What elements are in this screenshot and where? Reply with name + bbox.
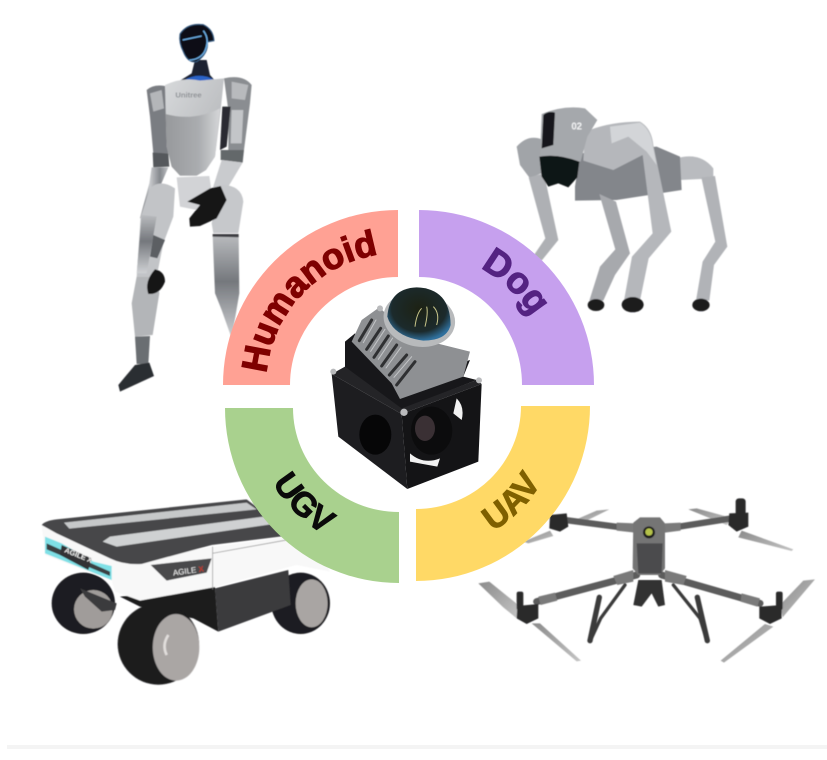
UGV side panel xyxy=(215,570,291,632)
humanoid right leg xyxy=(212,185,243,338)
sensor dome xyxy=(387,287,451,341)
dog main leg highlight xyxy=(610,123,657,165)
dog torso xyxy=(575,147,682,201)
drone arms xyxy=(537,518,760,603)
sector: UAV xyxy=(416,406,590,581)
humanoid left foot xyxy=(118,363,154,392)
humanoid head xyxy=(180,24,214,62)
drone propellers xyxy=(478,508,815,663)
bottom band xyxy=(7,745,827,749)
humanoid belly plate xyxy=(166,108,220,176)
UGV white shell xyxy=(42,525,330,601)
humanoid collar light xyxy=(183,76,213,83)
label: Dog: Dog xyxy=(482,246,548,316)
dog main leg xyxy=(583,122,671,301)
sensor dome ring xyxy=(379,286,460,352)
drone arm joints xyxy=(538,523,760,607)
dog front left shoulder xyxy=(517,138,545,178)
UGV shell seams xyxy=(213,540,287,589)
dog rear hip xyxy=(677,156,713,180)
dog sensor panel xyxy=(542,112,555,148)
sensor mount wedge xyxy=(332,333,477,409)
dog front foot xyxy=(622,297,644,312)
dog head xyxy=(540,107,597,162)
robot dog xyxy=(517,107,727,312)
dog grille xyxy=(539,156,579,187)
sensor window highlights xyxy=(410,398,463,467)
dog rear foot xyxy=(692,299,710,311)
drone body xyxy=(633,517,665,575)
wheeled ground vehicle xyxy=(42,499,330,685)
UGV underside xyxy=(120,587,218,632)
UGV side badge: AGILE X xyxy=(172,564,205,578)
humanoid near arm xyxy=(212,77,252,194)
label: UAV: UAV xyxy=(480,468,537,528)
label: UGV: UGV xyxy=(276,470,338,530)
drone lower body panel xyxy=(637,543,663,573)
sensor cube right face xyxy=(402,384,482,489)
humanoid knee guard xyxy=(147,269,165,294)
sector: Dog xyxy=(419,210,594,385)
central sensor xyxy=(330,286,482,489)
dog middle leg xyxy=(589,194,630,301)
label: Humanoid: Humanoid xyxy=(241,228,377,372)
drone legs xyxy=(590,585,707,641)
sensor bolts xyxy=(330,305,482,416)
UGV name strip xyxy=(47,543,110,576)
dog number: 02 xyxy=(571,121,582,132)
UGV deck xyxy=(42,499,293,564)
UGV rear left wheel xyxy=(52,573,117,634)
humanoid pelvis xyxy=(177,176,212,210)
UGV name strip: AGILE X xyxy=(63,546,94,565)
sensor side hole xyxy=(359,415,391,455)
UGV teal light strip xyxy=(45,537,112,580)
humanoid neck xyxy=(180,60,215,81)
dog front left leg xyxy=(529,173,558,261)
sensor cube left face xyxy=(332,374,407,489)
drone motors xyxy=(517,498,783,624)
sensor cube top xyxy=(332,367,482,414)
humanoid left leg xyxy=(132,183,175,364)
humanoid hand xyxy=(187,186,227,227)
sensor fins xyxy=(359,320,415,385)
UGV rail front xyxy=(103,517,273,547)
UGV right wheel xyxy=(271,573,330,634)
humanoid rear arm xyxy=(140,85,169,218)
UGV side badge xyxy=(151,558,212,581)
humanoid torso xyxy=(165,78,224,176)
humanoid robot xyxy=(118,24,252,392)
dog rear leg xyxy=(696,176,727,301)
UGV rail back xyxy=(64,503,257,529)
humanoid dark joint strip xyxy=(220,107,231,150)
hub diagram xyxy=(223,210,594,583)
humanoid visor light xyxy=(183,31,207,60)
sensor dome reflections xyxy=(415,307,438,327)
drone camera xyxy=(643,526,655,538)
sensor heat sink xyxy=(352,307,470,399)
UGV front wheel xyxy=(118,603,199,685)
Unitree logo: Unitree xyxy=(175,90,202,99)
drone gimbal xyxy=(633,580,665,607)
sensor lens xyxy=(411,407,452,455)
sector: Humanoid xyxy=(223,210,398,385)
sector: UGV xyxy=(225,408,399,583)
dog middle foot xyxy=(588,299,604,311)
drone xyxy=(478,498,815,663)
